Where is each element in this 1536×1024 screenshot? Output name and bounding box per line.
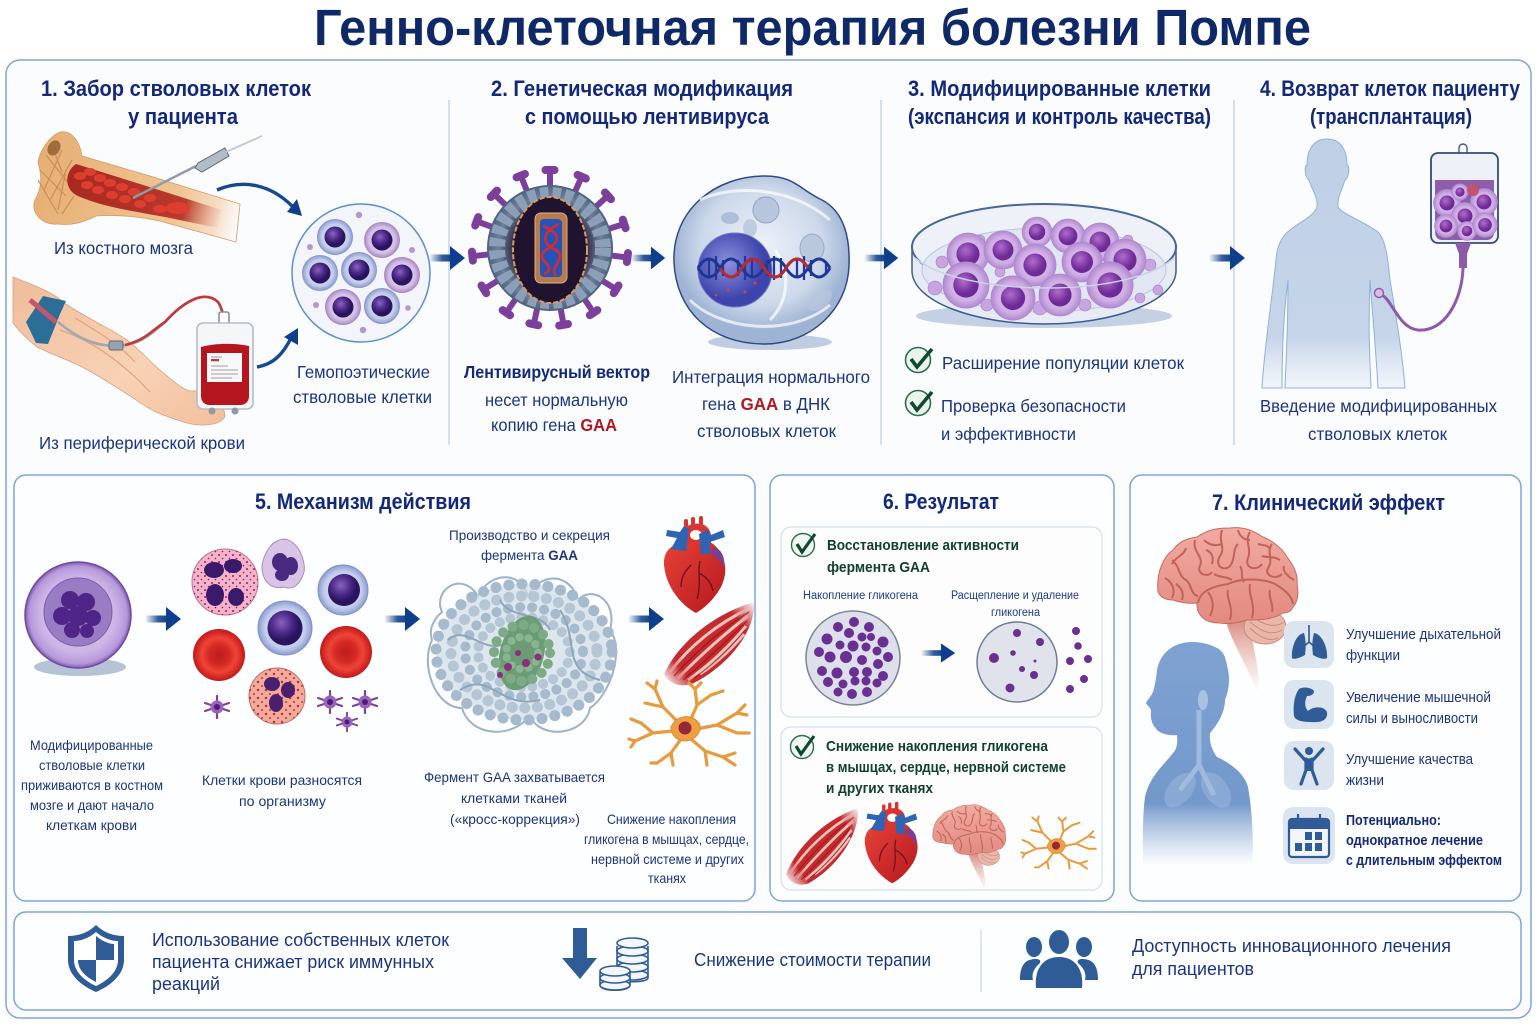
text: glycogen reduction [826, 738, 1066, 797]
text: stem cells engraft: приживаются в костном [21, 777, 163, 793]
text: accessibility: Доступность инновационного лечения [1132, 936, 1451, 956]
arrow: step 2 to 3 [864, 247, 898, 269]
title: Генно-клеточная терапия болезни Помпе [314, 0, 1311, 56]
text: muscle strength [1346, 690, 1491, 727]
text: glycogen reduction: и других тканях [826, 780, 934, 797]
illustration: arm with blood bag [13, 277, 253, 425]
panel: 7 clinical effect [1130, 475, 1521, 901]
text: one-time treatment: однократное лечение [1346, 833, 1483, 849]
icon: lungs [1284, 621, 1334, 668]
text: glycogen reduction: Снижение накопления гликогена [826, 738, 1049, 755]
icon: neuron [1021, 816, 1096, 869]
label: hematopoietic stem cells [293, 362, 432, 407]
icon: people [1020, 930, 1098, 988]
text: quality of life [1346, 752, 1474, 789]
text: one-time treatment: Потенциально: [1346, 813, 1441, 829]
heading: step 6: 6. Результат [883, 489, 999, 514]
heading: step 4: (трансплантация) [1310, 104, 1472, 129]
text: stem cells engraft: стволовые клетки [39, 757, 145, 773]
heading: step 2: 2. Генетическая модификация [491, 76, 793, 101]
arrow: vector to cell [631, 247, 665, 269]
icon: muscle [786, 808, 858, 885]
text: gene integration: гена GAA в ДНК [702, 394, 831, 414]
text: one-time treatment: с длительным эффектом [1346, 853, 1502, 869]
check: safety check [906, 390, 932, 416]
heading: step 5: 5. Механизм действия [255, 489, 471, 514]
illustration: GAA enzyme structure [428, 577, 616, 732]
text: lentiviral vector [464, 362, 650, 435]
text: enzyme activity: фермента GAA [827, 559, 930, 576]
arrow: step 3 to 4 [1209, 246, 1245, 270]
text: breathing [1346, 627, 1501, 664]
text: stem cells engraft: Модифицированные [30, 737, 153, 753]
icon: heart [664, 516, 725, 613]
text: blood cells spread: Клетки крови разносятся [202, 772, 362, 788]
arrow: step 1 to 2 [429, 246, 465, 270]
text: infusion: стволовых клеток [1308, 424, 1447, 444]
check: enzyme activity [792, 534, 815, 556]
heading: step 1: у пациента [128, 104, 239, 129]
benefit: muscle strength [1284, 680, 1491, 729]
illustration: hematopoietic stem cells [292, 204, 430, 342]
illustration: cell infusion bag [1374, 144, 1498, 330]
text: safety and efficacy [941, 396, 1126, 444]
illustration: lentiviral vector [468, 166, 632, 330]
icon: heart [865, 802, 918, 883]
text: glycogen accumulation: Накопление гликогена [803, 590, 919, 602]
text: safety and efficacy: Проверка безопасности [941, 396, 1126, 416]
text: muscle strength: Увеличение мышечной [1346, 690, 1491, 706]
illustration: cell with cleared glycogen [977, 622, 1092, 702]
heading: step 4 [1260, 76, 1521, 129]
text: infusion: Введение модифицированных [1260, 396, 1497, 416]
benefit: breathing [1284, 621, 1501, 668]
text: own cells [152, 930, 449, 994]
text: enzyme secretion: фермента GAA [481, 547, 578, 563]
illustration: patient silhouette [1262, 139, 1405, 388]
heading: step 2 [491, 76, 793, 129]
text: gene integration: Интеграция нормального [672, 367, 870, 387]
arrow: stem cell to blood cells [145, 607, 181, 631]
arrow: blood cells to enzyme [384, 607, 420, 631]
text: accessibility [1132, 936, 1451, 979]
heading: step 3: (экспансия и контроль качества) [908, 104, 1211, 129]
text: one-time treatment [1346, 813, 1502, 869]
arrow: glycogen reduction [921, 643, 955, 663]
illustration: human head and torso [1143, 642, 1253, 866]
text: glycogen reduction [584, 811, 749, 886]
text: own cells: реакций [152, 974, 220, 994]
text: glycogen reduction: в мышцах, сердце, нервной системе [826, 759, 1066, 776]
benefit: one-time treatment [1283, 807, 1502, 869]
icon: brain [933, 805, 1006, 891]
illustration: cell full of glycogen [806, 611, 900, 705]
text: quality of life: Улучшение качества [1346, 752, 1474, 768]
icon: neuron [629, 681, 749, 765]
heading: step 2: с помощью лентивируса [525, 104, 770, 129]
panel: step 1 stem cell collection [13, 76, 432, 453]
text: lentiviral vector: несет нормальную [485, 390, 628, 410]
illustration: brain [1158, 528, 1298, 693]
icon: raised arms person [1284, 741, 1334, 790]
text: quality of life: жизни [1346, 773, 1384, 789]
text: lentiviral vector: копию гена GAA [491, 415, 617, 435]
text: infusion [1260, 396, 1497, 444]
text: enzyme activity [827, 537, 1019, 576]
heading: step 7: 7. Клинический эффект [1212, 490, 1445, 515]
panel: 6 result [770, 475, 1114, 901]
text: cost reduction: Снижение стоимости терапии [694, 950, 931, 970]
text: lentiviral vector: Лентивирусный вектор [464, 362, 650, 382]
heading: step 3 [908, 76, 1211, 129]
sub-panel: enzyme activity restored [781, 527, 1102, 717]
heading: step 1 [41, 76, 312, 129]
icon: shield [68, 925, 124, 992]
text: stem cells engraft: мозге и дают начало [30, 797, 154, 813]
panel: step 2 genetic modification [464, 76, 870, 441]
text: enzyme activity: Восстановление активности [827, 537, 1019, 554]
arrow: blood to stem cells [257, 328, 298, 367]
text: glycogen breakdown [951, 590, 1079, 619]
illustration: petri dish [912, 204, 1176, 328]
text: accessibility: для пациентов [1132, 959, 1254, 979]
panel: step 4 transplantation [1260, 76, 1521, 444]
text: own cells: Использование собственных клеток [152, 930, 449, 950]
heading: step 3: 3. Модифицированные клетки [908, 76, 1211, 101]
panel: step 3 expansion and quality control [906, 76, 1211, 444]
text: blood cells spread: по организму [239, 793, 326, 809]
illustration: blood cells [192, 539, 377, 731]
text: gene integration: стволовых клеток [697, 421, 836, 441]
text: blood cells spread [202, 772, 362, 809]
benefit: quality of life [1284, 741, 1474, 790]
text: safety and efficacy: и эффективности [941, 424, 1076, 444]
label: hematopoietic stem cells: Гемопоэтические [297, 362, 430, 382]
check: population expansion [906, 348, 932, 372]
text: glycogen reduction: нервной системе и других [591, 851, 744, 867]
label: peripheral blood: Из периферической крови [39, 433, 245, 453]
text: population expansion: Расширение популяции клеток [942, 353, 1184, 373]
sub-panel: glycogen reduction in tissues [781, 727, 1102, 891]
text: own cells: пациента снижает риск иммунных [152, 952, 434, 972]
arrow: enzyme to organs [628, 607, 664, 631]
text: glycogen reduction: гликогена в мышцах, сердце, [584, 831, 749, 847]
icon: muscle [664, 602, 754, 685]
text: glycogen breakdown: гликогена [991, 607, 1041, 619]
panel: bottom benefits [14, 912, 1521, 1010]
label: bone marrow: Из костного мозга [54, 238, 193, 258]
heading: step 1: 1. Забор стволовых клеток [41, 76, 312, 101]
label: hematopoietic stem cells: стволовые клетки [293, 387, 432, 407]
arrow: marrow to stem cells [217, 184, 302, 216]
text: breathing: функции [1346, 648, 1400, 664]
text: glycogen reduction: Снижение накопления [607, 811, 736, 827]
text: stem cells engraft [21, 737, 163, 833]
illustration: bone marrow aspiration [34, 132, 262, 242]
panel: 5 mechanism of action [14, 475, 755, 901]
text: cross-correction [424, 769, 605, 827]
illustration: modified stem cell [25, 562, 131, 676]
text: gene integration [672, 367, 870, 441]
check: glycogen reduction [790, 736, 814, 758]
text: enzyme secretion: Производство и секреция [449, 527, 610, 543]
text: breathing: Улучшение дыхательной [1346, 627, 1501, 643]
text: cross-correction: («кросс-коррекция») [450, 811, 580, 827]
icon: cost down with coins [562, 928, 648, 990]
icon: calendar [1283, 807, 1335, 864]
text: muscle strength: силы и выносливости [1346, 711, 1478, 727]
illustration: cell with integrated DNA [674, 176, 849, 350]
text: cross-correction: Фермент GAA захватывается [424, 769, 605, 785]
text: glycogen breakdown: Расщепление и удаление [951, 590, 1079, 602]
text: enzyme secretion [449, 527, 610, 563]
text: glycogen reduction: тканях [648, 870, 686, 886]
text: cross-correction: клетками тканей [461, 790, 567, 806]
text: stem cells engraft: клеткам крови [46, 817, 137, 833]
icon: arm muscle [1284, 680, 1334, 729]
